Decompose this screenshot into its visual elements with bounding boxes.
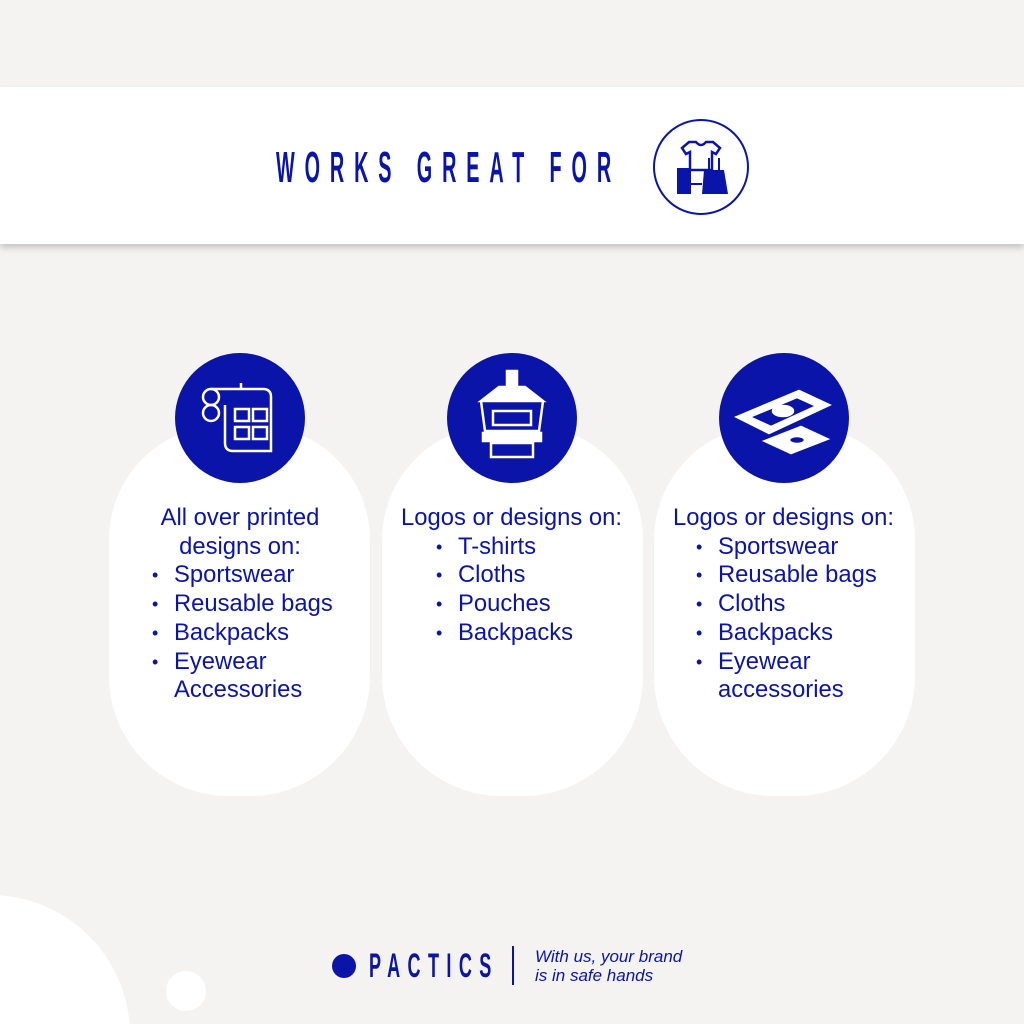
footer logo: is in safe hands — [535, 966, 653, 985]
text: card 1: Accessories — [174, 676, 302, 703]
text: card 3: Reusable bags — [718, 561, 877, 588]
text: card 3: accessories — [718, 676, 844, 703]
text: card 3: Sportswear — [718, 533, 838, 560]
text: card 3 — [673, 504, 894, 703]
header band — [0, 87, 1024, 244]
footer logo: With us, your brand — [535, 947, 682, 966]
text: card 1: Backpacks — [174, 619, 289, 646]
icon: roll printer — [175, 353, 305, 483]
text: card 1 — [152, 504, 333, 703]
text: card 3: Backpacks — [718, 619, 833, 646]
text: card 1: Sportswear — [174, 561, 294, 588]
text: card 3: Eyewear — [718, 648, 811, 675]
text: card 1: designs on: — [179, 533, 301, 560]
text: card 3: Cloths — [718, 590, 785, 617]
icon: screen print frame — [719, 353, 849, 483]
text: card 1: Eyewear — [174, 648, 267, 675]
footer logo — [332, 946, 683, 985]
text: card 2: Backpacks — [458, 619, 573, 646]
text: card 3: Logos or designs on: — [673, 504, 894, 531]
text: card 2: Cloths — [458, 561, 525, 588]
icon: clothing circle — [653, 119, 749, 215]
text: card 2: Logos or designs on: — [401, 504, 622, 531]
panel: card 2 — [382, 425, 643, 796]
text: card 2: Pouches — [458, 590, 551, 617]
decorative circles — [0, 896, 206, 1024]
text: card 2: T-shirts — [458, 533, 536, 560]
text: card 1: Reusable bags — [174, 590, 333, 617]
icon: heat press — [447, 353, 577, 483]
panel: card 1 — [109, 425, 370, 796]
footer logo: PACTICS — [369, 947, 499, 985]
text: card 1: All over printed — [161, 504, 319, 531]
text: card 2 — [401, 504, 622, 646]
title: WORKS GREAT FOR — [276, 143, 621, 192]
panel: card 3 — [654, 425, 915, 796]
